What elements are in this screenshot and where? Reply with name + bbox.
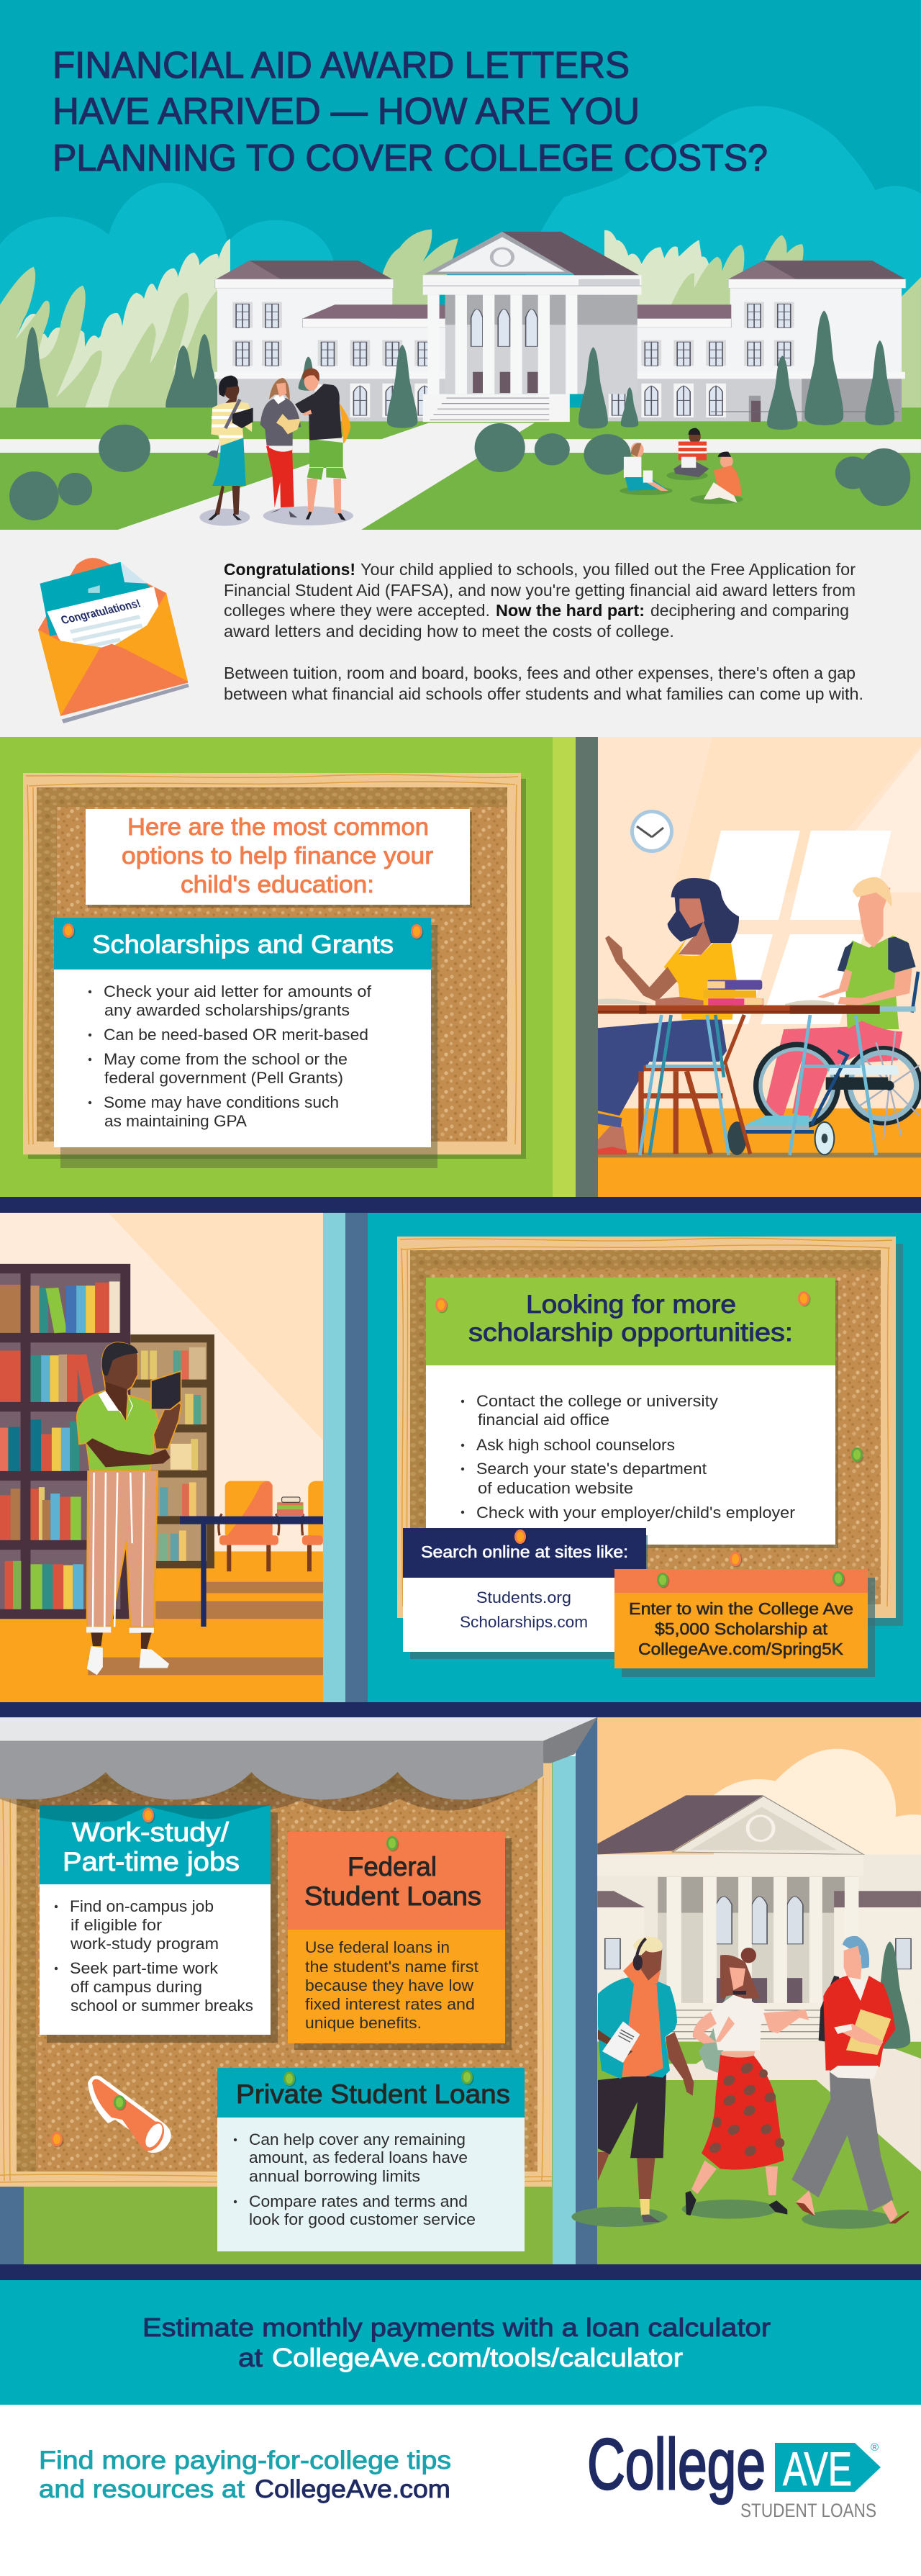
text block: congratulations paragraph: deciphering and comparing: [650, 601, 849, 620]
text block: congratulations paragraph: Your child applied to schools, you filled out the Free Application for: [360, 560, 856, 579]
panel: loan calculator call to action: Estimate monthly payments with a loan calculator: [142, 2313, 771, 2342]
card: scholarships and grants: federal government (Pell Grants): [104, 1069, 343, 1087]
text block: congratulations paragraph: colleges where they were accepted.: [224, 601, 490, 620]
illustration: classroom scene: [598, 737, 921, 1198]
man in wheelchair: [727, 877, 920, 1155]
corkboard: [0, 1756, 552, 2187]
card: work-study: Part-time jobs: [63, 1847, 240, 1876]
text block: gap paragraph: between what financial aid schools offer students and what families can come up with.: [224, 684, 863, 703]
text block: find more tips: Find more paying-for-college tips: [39, 2446, 451, 2475]
woman student: [598, 878, 739, 1154]
chairs and table: [180, 1481, 323, 1627]
heading card: Here are the most common: [127, 813, 429, 840]
card: college ave scholarship: CollegeAve.com/Spring5K: [638, 1640, 844, 1658]
card: college ave scholarship: [614, 1569, 875, 1677]
logo: College Ave Student Loans: [587, 2424, 881, 2521]
text block: congratulations paragraph: award letters and deciding how to meet the costs of college.: [224, 622, 674, 641]
table and legs: [598, 1005, 880, 1155]
tree backdrop: [16, 327, 49, 418]
reading student: [77, 1342, 181, 1675]
card: private student loans: amount, as federal loans have: [249, 2148, 468, 2166]
card: private student loans: Compare rates and terms and: [249, 2192, 468, 2210]
panel: loan calculator call to action: CollegeAve.com/tools/calculator: [272, 2343, 683, 2372]
hills between wings: [376, 230, 458, 306]
title: FINANCIAL AID AWARD LETTERS: [53, 45, 630, 86]
card: federal student loans: fixed interest rates and: [305, 1995, 475, 2013]
panel: loan calculator call to action: [0, 2280, 921, 2405]
logo: College Ave Student Loans: STUDENT LOANS: [740, 2500, 876, 2521]
shelf front: [0, 1264, 130, 1619]
card: looking for more: scholarship opportunities:: [468, 1319, 793, 1347]
card: search online: Scholarships.com: [460, 1613, 588, 1631]
card: search online: Search online at sites like:: [421, 1542, 628, 1561]
card: scholarships and grants: Check your aid letter for amounts of: [104, 982, 372, 1000]
card: private student loans: annual borrowing limits: [249, 2167, 420, 2185]
card: work-study: [40, 1805, 278, 2043]
card: federal student loans: Student Loans: [304, 1881, 481, 1911]
icon: congratulations envelope: [38, 558, 189, 723]
card: private student loans: look for good customer service: [249, 2210, 476, 2228]
card: looking for more: Contact the college or university: [476, 1392, 718, 1410]
card: looking for more: Looking for more: [526, 1291, 736, 1319]
lawn: [0, 407, 921, 533]
text block: find more tips: CollegeAve.com: [255, 2475, 450, 2503]
title: HAVE ARRIVED — HOW ARE YOU: [53, 91, 640, 132]
card: federal student loans: unique benefits.: [305, 2014, 422, 2032]
text block: find more tips: [39, 2446, 451, 2503]
panel: scholarships and grants: [0, 737, 921, 1213]
illustration: three standing students: [199, 369, 353, 526]
text block: congratulations paragraph: [224, 560, 856, 641]
text block: congratulations paragraph: Congratulations!: [224, 560, 355, 579]
card: federal student loans: Use federal loans in: [305, 1938, 450, 1956]
card: scholarships and grants: as maintaining GPA: [104, 1112, 247, 1130]
card: scholarships and grants: Some may have conditions such: [104, 1093, 339, 1111]
card: work-study: if eligible for: [71, 1916, 162, 1934]
card: scholarships and grants: May come from the school or the: [104, 1050, 348, 1068]
logo: College Ave Student Loans: AVE: [783, 2442, 852, 2495]
logo: College Ave Student Loans: ®: [871, 2441, 879, 2454]
text block: gap paragraph: [224, 664, 863, 703]
card: federal student loans: the student's name first: [305, 1958, 478, 1976]
books and table: [598, 980, 834, 1005]
card: looking for more: of education website: [478, 1479, 633, 1497]
illustration: trees and shrubs: [9, 310, 910, 520]
hills left: [0, 239, 230, 408]
card: looking for more: financial aid office: [478, 1411, 609, 1429]
card: work-study: Find on-campus job: [70, 1897, 214, 1915]
panel: loans and jobs: [0, 1717, 921, 2280]
card: scholarships and grants: [54, 918, 437, 1168]
student with polka dot skirt: [686, 1948, 809, 2215]
clock: [630, 810, 673, 853]
title: [53, 45, 768, 179]
card: scholarships and grants: Can be need-based OR merit-based: [104, 1026, 368, 1044]
card: looking for more: Check with your employer/child's employer: [476, 1504, 795, 1522]
card: scholarships and grants: Scholarships and Grants: [92, 931, 394, 959]
card: work-study: Work-study/: [72, 1817, 230, 1847]
card: search online: [403, 1528, 648, 1659]
card: college ave scholarship: Enter to win the College Ave: [629, 1599, 853, 1618]
shelf back: [130, 1334, 214, 1568]
heading card: child's education:: [181, 871, 374, 898]
illustration: library scene: [0, 1213, 323, 1702]
card: federal student loans: Federal: [348, 1852, 437, 1881]
text block: find more tips: and resources at: [39, 2475, 245, 2503]
card: private student loans: Private Student Loans: [236, 2079, 510, 2109]
illustration: college building: [214, 232, 906, 422]
card: federal student loans: [288, 1832, 512, 2050]
card: college ave scholarship: $5,000 Scholarship at: [655, 1619, 828, 1638]
panel: more scholarship opportunities: [0, 1213, 921, 1717]
card: work-study: school or summer breaks: [71, 1997, 253, 2015]
corkboard: [23, 773, 526, 1159]
card: work-study: Seek part-time work: [70, 1959, 219, 1977]
clouds: [0, 106, 921, 360]
card: looking for more: [426, 1278, 838, 1548]
icon: congratulations envelope: Congratulations!: [59, 597, 142, 627]
panel: introduction: [0, 530, 921, 737]
student with notebook: [791, 1936, 909, 2223]
heading card: [86, 809, 472, 908]
hills right: [604, 230, 921, 410]
text block: gap paragraph: Between tuition, room and board, books, fees and other expenses, there's often a gap: [224, 664, 856, 682]
student with headphones: [598, 1937, 694, 2222]
title: PLANNING TO COVER COLLEGE COSTS?: [53, 137, 768, 179]
corkboard: [397, 1237, 903, 1626]
text block: congratulations paragraph: Now the hard part:: [496, 601, 645, 620]
card: looking for more: Ask high school counselors: [476, 1436, 675, 1454]
panel: loan calculator call to action: at: [238, 2343, 263, 2372]
card: scholarships and grants: any awarded scholarships/grants: [104, 1001, 350, 1019]
awning: [0, 1717, 597, 1812]
card: work-study: work-study program: [70, 1935, 219, 1953]
card: looking for more: Search your state's department: [476, 1460, 707, 1478]
card: work-study: off campus during: [71, 1978, 202, 1996]
card: federal student loans: because they have low: [305, 1976, 473, 1994]
illustration: seated students: [620, 428, 743, 504]
logo: College Ave Student Loans: College: [587, 2424, 766, 2505]
illustration: campus walk: [571, 1717, 921, 2264]
heading card: options to help finance your: [122, 842, 433, 869]
card: private student loans: [217, 2068, 525, 2251]
card: search online: Students.org: [476, 1588, 571, 1606]
card: private student loans: Can help cover any remaining: [249, 2130, 466, 2148]
panel: hero header: [0, 0, 921, 533]
icon: megaphone: [88, 2076, 171, 2155]
text block: congratulations paragraph: Financial Student Aid (FAFSA), and now you're getting financial aid award letters from: [224, 581, 856, 600]
